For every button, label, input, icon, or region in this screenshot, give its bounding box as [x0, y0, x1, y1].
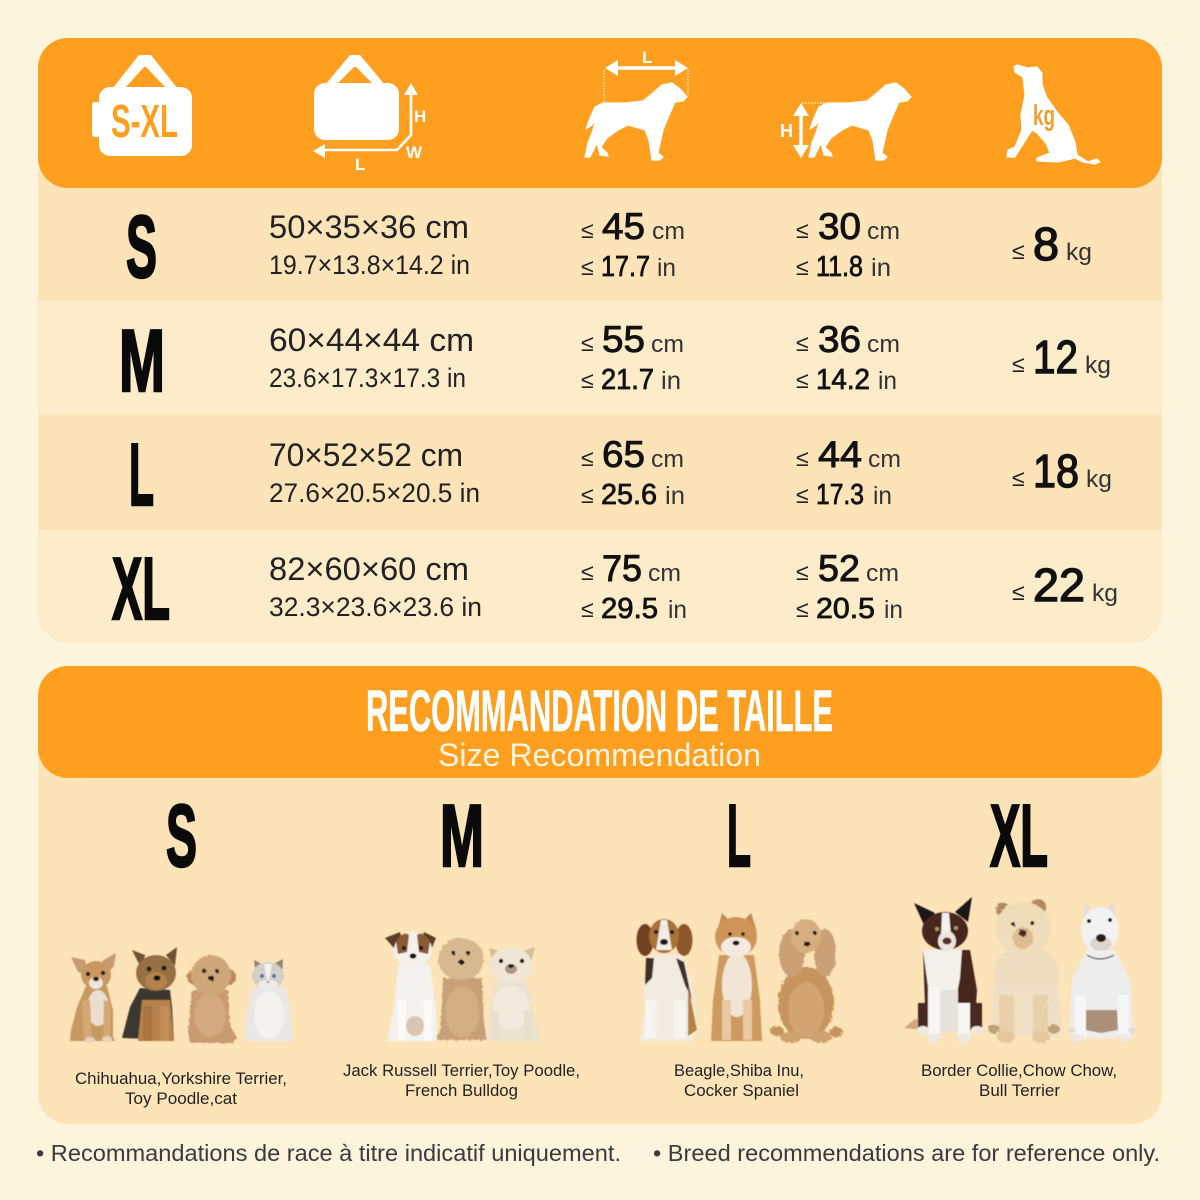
row XL: 20.5 — [816, 593, 875, 625]
pet: toy poodle — [187, 955, 237, 1043]
size column S: S — [166, 786, 197, 885]
row L: 17.3 — [816, 479, 864, 511]
row XL — [112, 539, 1118, 638]
row S: ≤ — [796, 217, 809, 243]
row S: in — [871, 254, 891, 282]
row L: cm — [651, 446, 684, 473]
icon: bag dimensions — [313, 55, 426, 174]
row L: 25.6 — [601, 479, 657, 511]
row XL: 75 — [602, 548, 642, 589]
footnote: French: • Recommandations de race à titre indicatif uniquement. — [36, 1140, 621, 1166]
icon: bag dimensions: W — [406, 143, 423, 162]
row XL: 82×60×60 cm — [269, 551, 469, 587]
breeds: large: Beagle,Shiba Inu, — [674, 1062, 804, 1080]
row XL: cm — [866, 560, 899, 587]
row M: 60×44×44 cm — [269, 322, 474, 358]
breeds: small: Toy Poodle,cat — [125, 1090, 237, 1108]
size column L: L — [727, 786, 751, 885]
row S: 11.8 — [816, 251, 863, 283]
row M: 14.2 — [816, 364, 870, 396]
row M: 23.6×17.3×17.3 in — [269, 363, 466, 393]
row L: kg — [1086, 466, 1112, 493]
breeds: large — [674, 1062, 804, 1100]
panel: size recommendation — [38, 666, 1162, 1124]
pet: cat — [245, 959, 293, 1041]
pets: large — [636, 913, 843, 1043]
row L: 70×52×52 cm — [269, 437, 463, 473]
row S: 17.7 — [601, 251, 650, 283]
row XL: ≤ — [796, 559, 809, 585]
row M: ≤ — [1012, 351, 1025, 377]
row L: ≤ — [1012, 465, 1025, 491]
row XL: in — [668, 596, 687, 624]
row XL: 32.3×23.6×23.6 in — [269, 592, 482, 622]
size column M — [343, 786, 580, 1100]
row S — [126, 197, 1092, 296]
table rows background — [38, 170, 1162, 643]
row XL: XL — [112, 539, 170, 638]
row L: 27.6×20.5×20.5 in — [269, 478, 480, 508]
pet: beagle — [636, 919, 697, 1041]
row XL: ≤ — [581, 596, 594, 622]
row M: ≤ — [796, 330, 809, 356]
row S: S — [126, 197, 157, 296]
row M: in — [878, 367, 897, 395]
row S: ≤ — [796, 254, 809, 280]
breeds: small — [75, 1070, 287, 1108]
icon: bag dimensions: L — [355, 155, 365, 174]
row M: ≤ — [581, 330, 594, 356]
row S: 50×35×36 cm — [269, 209, 469, 245]
size column M: M — [440, 786, 484, 885]
row XL: 29.5 — [601, 593, 658, 625]
pet: jack russell terrier — [385, 932, 437, 1041]
row M: cm — [651, 331, 684, 358]
row L: in — [665, 482, 685, 510]
row M: 36 — [818, 319, 861, 360]
icon: bag with S-XL — [92, 55, 192, 156]
row L: in — [873, 482, 892, 510]
recommendation header band — [38, 666, 1162, 778]
breeds: small: Chihuahua,Yorkshire Terrier, — [75, 1070, 287, 1088]
row M: kg — [1085, 352, 1111, 379]
row L — [129, 425, 1112, 524]
breeds: large: Cocker Spaniel — [684, 1082, 799, 1100]
row M: 55 — [602, 319, 645, 360]
pet: toy poodle — [437, 938, 487, 1040]
row S: cm — [867, 218, 900, 245]
table header band — [38, 38, 1162, 188]
row S: 45 — [602, 206, 645, 247]
row S: ≤ — [581, 217, 594, 243]
row M: 21.7 — [601, 364, 654, 396]
row L: 65 — [602, 434, 645, 475]
row XL: ≤ — [1012, 579, 1025, 605]
row S: kg — [1066, 239, 1092, 266]
breeds: extra large: Bull Terrier — [979, 1082, 1061, 1100]
pet: bull terrier — [1068, 900, 1136, 1042]
pet: chihuahua — [70, 953, 116, 1043]
icon: dog height: H — [780, 121, 793, 141]
row M: cm — [867, 331, 900, 358]
row M — [119, 311, 1111, 410]
row M: 12 — [1033, 331, 1078, 383]
pets: extra large — [904, 897, 1136, 1043]
icon: dog height — [780, 83, 911, 160]
row XL: ≤ — [581, 559, 594, 585]
panel: size table — [38, 38, 1162, 643]
heading: Size Recommendation — [438, 737, 761, 773]
icon: bag dimensions: H — [414, 107, 426, 126]
row L: L — [129, 425, 154, 524]
row M: ≤ — [581, 367, 594, 393]
row L: 44 — [818, 434, 862, 475]
size column XL: XL — [990, 786, 1048, 885]
row XL: ≤ — [796, 596, 809, 622]
row S: cm — [652, 218, 685, 245]
icon: sitting dog weight: kg — [1033, 100, 1055, 132]
breeds: extra large — [921, 1062, 1117, 1100]
recommendation background — [38, 750, 1162, 1124]
pet: border collie — [904, 897, 983, 1043]
pets: medium — [385, 932, 540, 1041]
size column XL — [904, 786, 1136, 1100]
breeds: medium — [343, 1062, 580, 1100]
row L: ≤ — [581, 482, 594, 508]
row XL: in — [884, 596, 903, 624]
icon: bag with S-XL: S-XL — [111, 95, 178, 147]
heading — [366, 679, 833, 773]
row S: 19.7×13.8×14.2 in — [269, 250, 470, 280]
pet: shiba inu — [711, 913, 762, 1041]
icon: dog length: L — [642, 48, 652, 67]
row L: 18 — [1033, 445, 1079, 497]
row S: ≤ — [581, 254, 594, 280]
row S: 30 — [818, 206, 861, 247]
pet: yorkshire terrier — [122, 947, 177, 1041]
pet: chow chow — [988, 899, 1062, 1043]
pet: french bulldog — [487, 947, 540, 1041]
row M: M — [119, 311, 165, 410]
icon: sitting dog weight — [1007, 65, 1100, 164]
row S: 8 — [1033, 218, 1059, 270]
row M: in — [661, 367, 681, 395]
row M: ≤ — [796, 367, 809, 393]
breeds: extra large: Border Collie,Chow Chow, — [921, 1062, 1117, 1080]
row XL: cm — [648, 560, 681, 587]
icon: dog length — [585, 48, 688, 160]
pet: cocker spaniel — [770, 919, 843, 1043]
row XL: kg — [1092, 580, 1118, 607]
breeds: medium: Jack Russell Terrier,Toy Poodle, — [343, 1062, 580, 1080]
row XL: 22 — [1033, 559, 1085, 611]
row S: ≤ — [1012, 238, 1025, 264]
breeds: medium: French Bulldog — [405, 1082, 518, 1100]
row XL: 52 — [818, 548, 860, 589]
footnote: English: • Breed recommendations are for reference only. — [653, 1140, 1160, 1166]
size column L — [636, 786, 843, 1100]
row L: ≤ — [796, 482, 809, 508]
row L: cm — [868, 446, 901, 473]
pets: small — [70, 947, 293, 1043]
row S: in — [657, 254, 676, 282]
row L: ≤ — [796, 445, 809, 471]
row L: ≤ — [581, 445, 594, 471]
size column S — [70, 786, 293, 1108]
